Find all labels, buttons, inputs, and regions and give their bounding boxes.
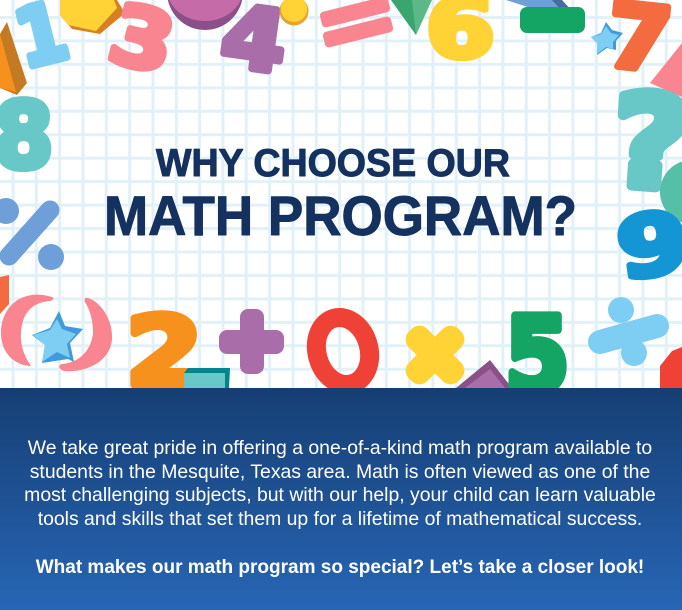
panel: intro [0,388,682,610]
icon: blue prism [506,0,572,13]
icon: yellow hexagon [60,0,125,34]
icon: green cone [391,0,432,35]
icon: purple circle [167,0,243,30]
math illustration header [0,0,682,388]
percent sign [0,198,64,270]
icon: small star [591,22,623,55]
icon: orange triangle [0,22,27,95]
divide sign [600,297,657,366]
icon: yellow coin [280,0,308,26]
intro paragraph: students in the Mesquite, Texas area. Math is often viewed as one of the [30,461,650,483]
icon: blue star [32,311,83,363]
digit 0 [309,311,377,391]
multiply sign [386,306,484,404]
icon: green circle [660,160,682,224]
icon: red cube [0,275,9,314]
minus sign [520,7,585,33]
title line 2: MATH PROGRAM? [104,184,577,247]
icon: purple diamond [456,360,512,388]
call to action: What makes our math program so special? Let’s take a closer look! [36,557,644,578]
plus sign [219,309,284,374]
intro paragraph: most challenging subjects, but with our help, your child can learn valuable [24,484,656,506]
parentheses [1,295,112,371]
intro paragraph: We take great pride in offering a one-of-a-kind math program available to [28,437,652,459]
intro paragraph [24,437,656,530]
equals sign [319,0,394,48]
title [104,142,577,247]
icon: red block [660,347,682,388]
icon: pink triangle [650,43,682,97]
intro paragraph: tools and skills that set them up for a lifetime of mathematical success. [38,508,642,530]
icon: teal box [184,368,230,388]
title line 1: WHY CHOOSE OUR [156,142,510,185]
